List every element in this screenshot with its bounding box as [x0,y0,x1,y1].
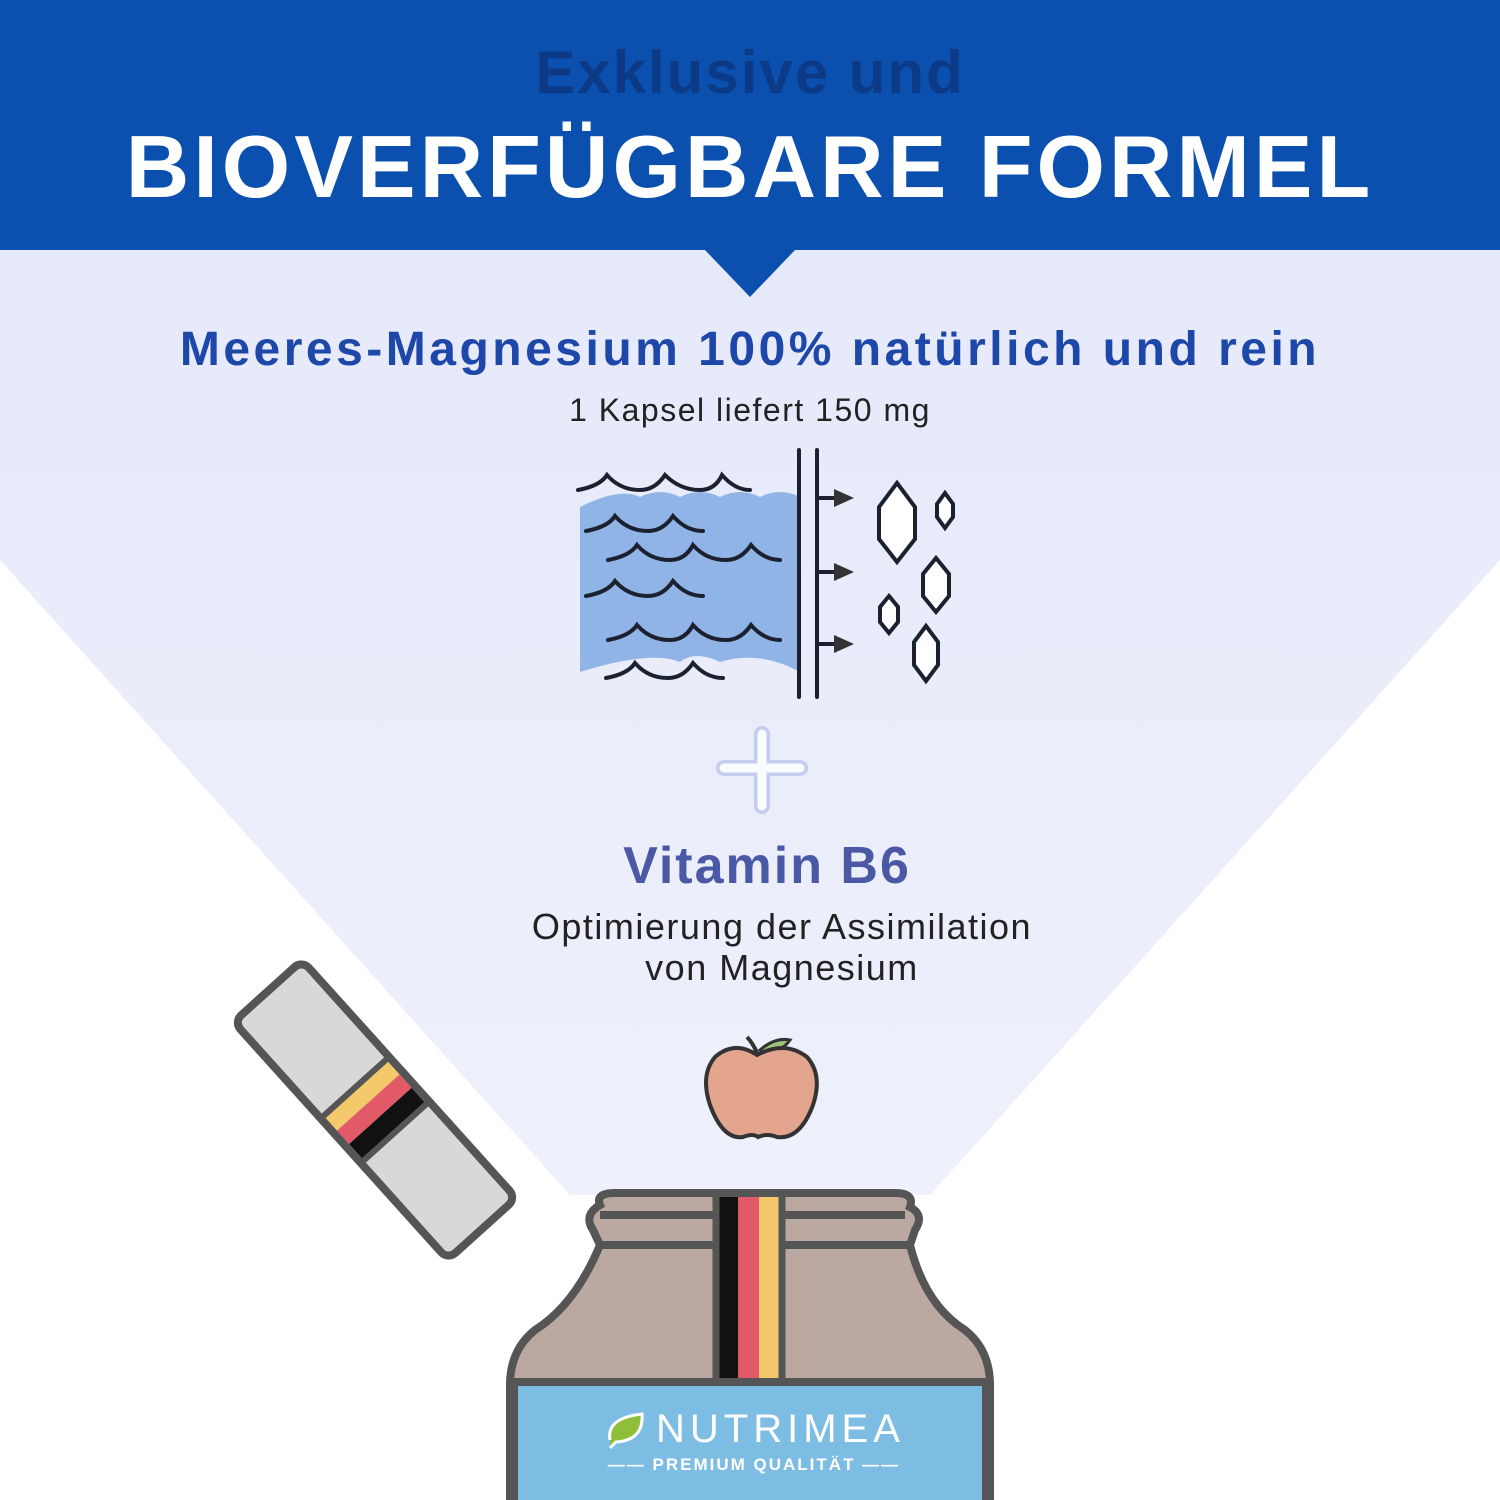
icon: jar lid [234,960,516,1260]
jar [506,1189,994,1500]
brand logo: NUTRIMEA [656,1407,905,1451]
text: assimilation [532,906,1032,988]
heading: sea magnesium: Meeres-Magnesium 100% natürlich und rein [180,323,1320,376]
icon: plus [716,726,808,814]
brand logo: —— PREMIUM QUALITÄT —— [608,1455,900,1474]
icon: sea water filtration [576,448,955,699]
header subtitle: Exklusive und [535,39,965,106]
text: capsule dose: 1 Kapsel liefert 150 mg [569,392,931,428]
icon: apple [704,1036,819,1140]
text: assimilation: von Magnesium [645,947,919,988]
brand logo [608,1407,905,1474]
header band [0,0,1500,297]
icon: leaf [608,1412,644,1449]
text: assimilation: Optimierung der Assimilation [532,906,1032,947]
heading: vitamin B6: Vitamin B6 [623,837,911,895]
header title: BIOVERFÜGBARE FORMEL [126,117,1374,216]
